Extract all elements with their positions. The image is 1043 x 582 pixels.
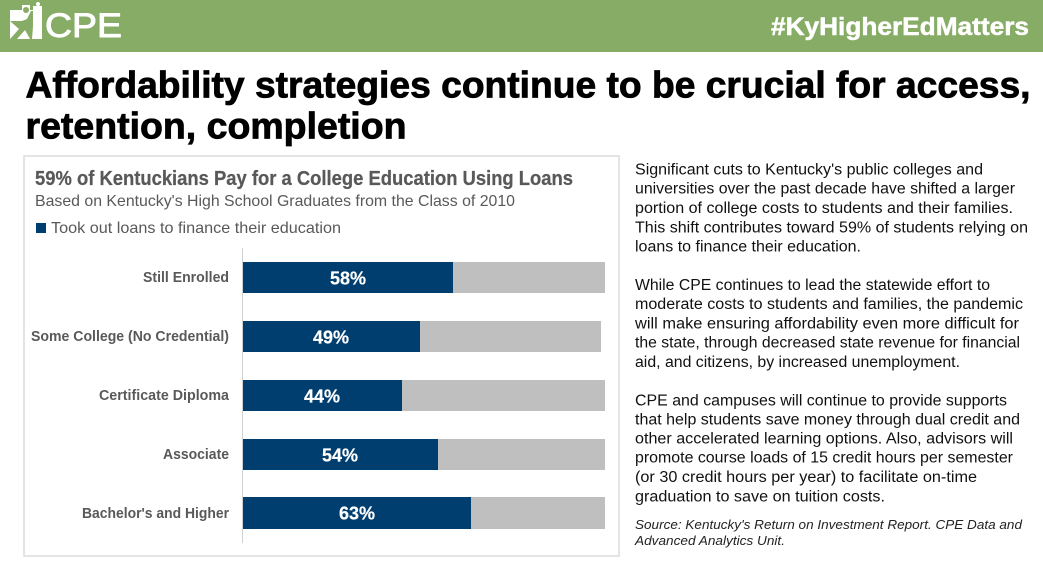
hashtag: #KyHigherEdMatters: [771, 13, 1029, 41]
text block: paragraph 3: [635, 392, 1020, 506]
text block: paragraph 3: that help students save money through dual credit and: [635, 412, 1020, 428]
icon: CPE logo mark: [10, 2, 42, 39]
text block: paragraph 2: [634, 277, 1023, 371]
bar: Some College: [31, 321, 601, 352]
source note: [634, 518, 1023, 548]
legend: Took out loans to finance their education: [51, 220, 341, 237]
text block: paragraph 1: This shift contributes toward 59% of students relying on: [635, 220, 1028, 236]
bar: Bachelor's and Higher: 63%: [339, 504, 375, 524]
text block: paragraph 3: graduation to save on tuition costs.: [635, 488, 885, 506]
text block: paragraph 2: will make ensuring affordability even more difficult for: [634, 316, 1019, 332]
text block: paragraph 1: Significant cuts to Kentucky's public colleges and: [635, 162, 983, 178]
bar: Certificate Diploma: [99, 380, 605, 411]
bar: Bachelor's and Higher: Bachelor's and Higher: [82, 506, 229, 522]
panel: loans chart: [24, 156, 619, 556]
text block: paragraph 1: loans to finance their education.: [635, 238, 861, 256]
bar: Associate: 54%: [322, 446, 358, 466]
bar: Certificate Diploma: Certificate Diploma: [99, 388, 230, 404]
axis line: [242, 248, 244, 543]
source note: Advanced Analytics Unit.: [634, 534, 785, 548]
bar: Still Enrolled: Still Enrolled: [143, 270, 229, 286]
bar: Still Enrolled: 58%: [330, 268, 366, 288]
chart subheading: Based on Kentucky's High School Graduates from the Class of 2010: [35, 193, 515, 210]
chart heading: 59% of Kentuckians Pay for a College Education Using Loans: [35, 168, 573, 190]
header band: [0, 0, 1043, 52]
source note: Source: Kentucky's Return on Investment Report. CPE Data and: [635, 518, 1023, 532]
bar: Associate: [163, 439, 605, 470]
text block: paragraph 3: other accelerated learning options. Also, advisors will: [635, 430, 1013, 448]
text block: paragraph 2: While CPE continues to lead the statewide effort to: [635, 277, 990, 294]
text block: paragraph 2: moderate costs to students and families, the pandemic: [635, 296, 1023, 313]
text block: paragraph 1: [635, 162, 1028, 256]
text block: paragraph 1: universities over the past decade have shifted a larger: [635, 180, 1015, 198]
logo wordmark: CPE: [45, 7, 122, 45]
title: [26, 64, 1030, 146]
title: retention, completion: [26, 104, 406, 146]
bar: Still Enrolled: [143, 262, 605, 293]
bar: Certificate Diploma: 44%: [304, 386, 340, 406]
text block: paragraph 3: CPE and campuses will continue to provide supports: [635, 392, 1007, 410]
text block: paragraph 3: promote course loads of 15 credit hours per semester: [635, 450, 1013, 466]
text block: paragraph 2: aid, and citizens, by increased unemployment.: [635, 354, 960, 371]
bar: Some College: 49%: [313, 328, 349, 348]
bar: Some College: Some College (No Credential): [31, 329, 229, 345]
bar: Bachelor's and Higher: [82, 497, 605, 529]
text block: paragraph 2: the state, through decreased state revenue for financial: [635, 334, 1020, 352]
text block: paragraph 3: (or 30 credit hours per year) to facilitate on-time: [635, 469, 977, 486]
bar: Associate: Associate: [163, 447, 229, 463]
bar chart: [31, 262, 605, 529]
title: Affordability strategies continue to be crucial for access,: [26, 64, 1030, 106]
text block: paragraph 1: portion of college costs to students and their families.: [635, 200, 1013, 217]
